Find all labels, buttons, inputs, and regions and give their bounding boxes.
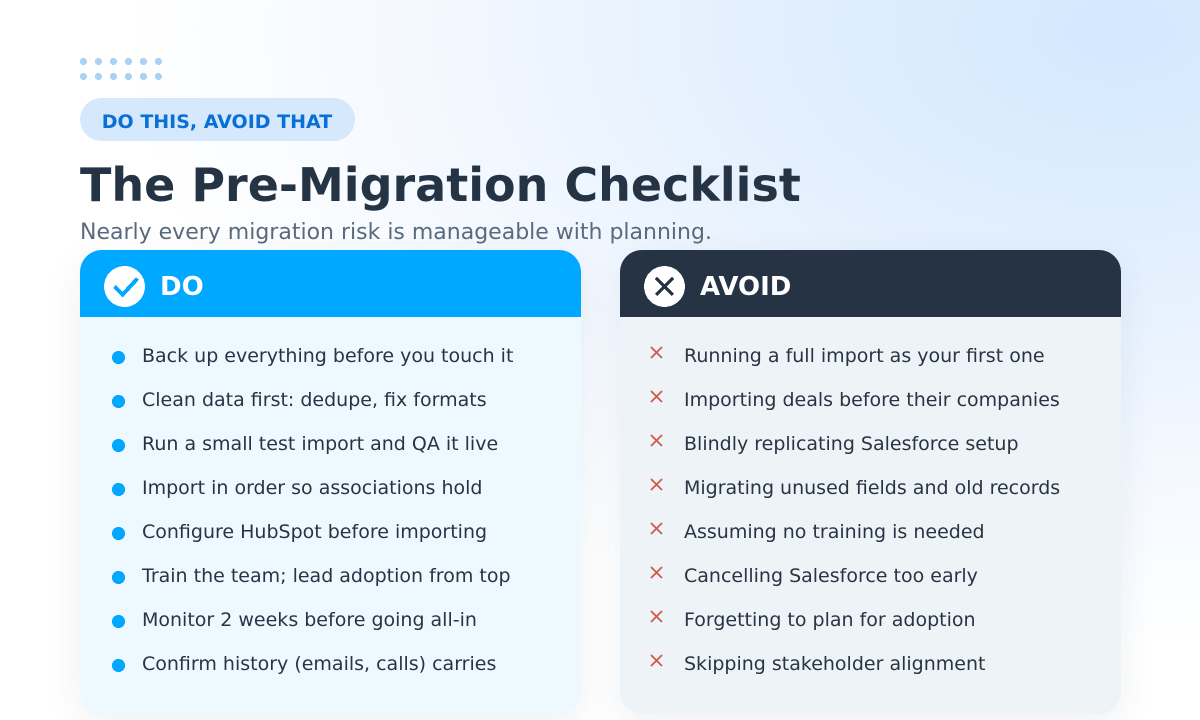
do bullet 2: [112, 395, 125, 408]
avoid item 4: Migrating unused fields and old records: [684, 477, 1060, 499]
icon: x badge: [644, 266, 685, 307]
icon: check badge: [104, 266, 145, 307]
avoid mark 4: [650, 478, 663, 491]
avoid item 3: Blindly replicating Salesforce setup: [684, 433, 1019, 455]
title: The Pre-Migration Checklist: [80, 158, 801, 212]
decorative dot grid: [80, 58, 162, 80]
avoid item 2: Importing deals before their companies: [684, 389, 1060, 411]
avoid item 1: Running a full import as your first one: [684, 345, 1045, 367]
do item 4: Import in order so associations hold: [142, 477, 482, 499]
do header: [80, 250, 581, 317]
do item 1: Back up everything before you touch it: [142, 345, 513, 367]
avoid mark 8: [650, 654, 663, 667]
do bullet 6: [112, 571, 125, 584]
avoid mark 1: [650, 346, 663, 359]
do bullet 5: [112, 527, 125, 540]
eyebrow pill: [80, 98, 355, 141]
avoid item 7: Forgetting to plan for adoption: [684, 609, 976, 631]
do bullet 8: [112, 659, 125, 672]
do item 8: Confirm history (emails, calls) carries: [142, 653, 496, 675]
do heading: DO: [160, 272, 204, 302]
do bullet 4: [112, 483, 125, 496]
do bullet 1: [112, 351, 125, 364]
avoid mark 3: [650, 434, 663, 447]
do bullet 7: [112, 615, 125, 628]
avoid item 8: Skipping stakeholder alignment: [684, 653, 985, 675]
avoid item 5: Assuming no training is needed: [684, 521, 985, 543]
do item 7: Monitor 2 weeks before going all-in: [142, 609, 477, 631]
panel: avoid: [620, 250, 1121, 714]
avoid header: [620, 250, 1121, 317]
panel: do: [80, 250, 581, 714]
do item 6: Train the team; lead adoption from top: [142, 565, 511, 587]
avoid mark 2: [650, 390, 663, 403]
do item 5: Configure HubSpot before importing: [142, 521, 487, 543]
do item 3: Run a small test import and QA it live: [142, 433, 498, 455]
avoid mark 5: [650, 522, 663, 535]
subtitle: Nearly every migration risk is manageable with planning.: [80, 220, 712, 245]
avoid mark 6: [650, 566, 663, 579]
avoid heading: AVOID: [700, 272, 791, 302]
eyebrow pill: DO THIS, AVOID THAT: [102, 111, 332, 133]
do item 2: Clean data first: dedupe, fix formats: [142, 389, 487, 411]
avoid item 6: Cancelling Salesforce too early: [684, 565, 978, 587]
avoid mark 7: [650, 610, 663, 623]
do bullet 3: [112, 439, 125, 452]
